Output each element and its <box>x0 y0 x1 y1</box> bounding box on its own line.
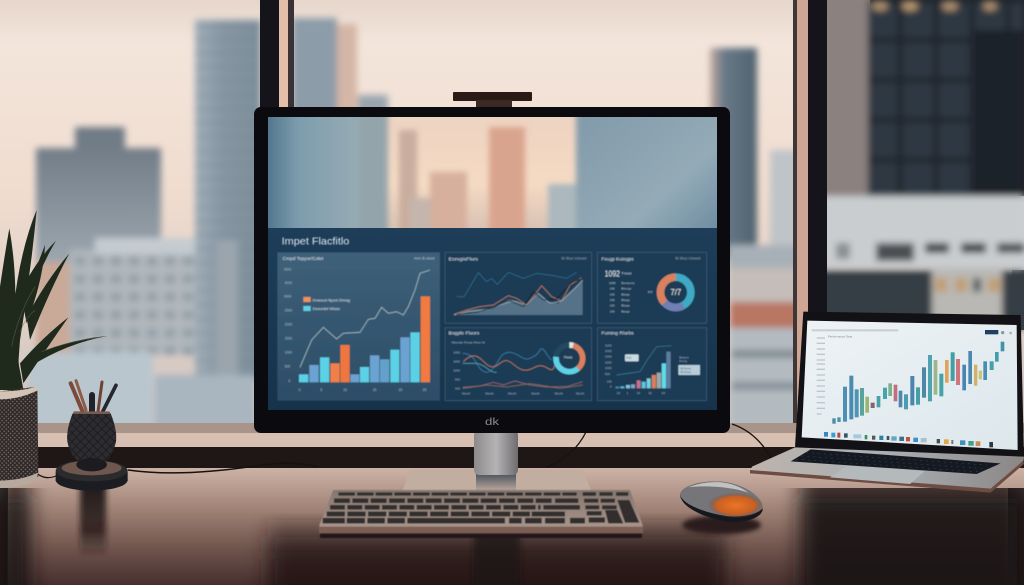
small table: 100 <box>610 298 615 302</box>
trend line <box>300 270 430 367</box>
y axis labels: 5000 <box>284 267 292 271</box>
pineapple body <box>67 413 116 467</box>
axis labels: 0 <box>610 385 612 389</box>
lines <box>463 349 583 388</box>
axis labels: Month <box>576 392 585 396</box>
side legend: Fumg <box>679 359 687 363</box>
leaf highlights <box>12 287 100 352</box>
x axis labels <box>299 388 427 392</box>
panel: area chart: EorvgisFlurs <box>449 256 479 262</box>
panel: donut summary <box>597 252 707 323</box>
trackpad <box>830 466 925 484</box>
panel: area chart: Bl Bluc Ulswet <box>561 257 587 261</box>
y axis labels: 1500 <box>285 337 292 341</box>
axis labels: 1000 <box>605 355 612 359</box>
leaves <box>0 210 107 390</box>
laptop lid <box>795 312 1024 457</box>
small table: 100 <box>610 303 615 307</box>
dashboard title: Impet Flacfitlo <box>282 236 350 247</box>
webcam <box>453 92 532 108</box>
small table: 1080 <box>609 281 616 285</box>
bars <box>615 352 671 388</box>
axis labels: Month <box>555 392 563 396</box>
axis labels: 15 <box>648 391 652 395</box>
monitor logo: dk <box>485 417 500 428</box>
panel: bar and line chart: mm B ulust <box>414 257 435 261</box>
panel: bar and line chart: Cmpd Tepyor/Colet <box>283 256 324 262</box>
panel: area chart <box>445 252 592 323</box>
legend: Desurdet Wlsse <box>313 306 341 311</box>
panel: donut summary: Fougp Kutogps <box>601 256 634 262</box>
panel: multi-line and donut <box>445 328 592 401</box>
floating bar chart <box>832 342 1004 424</box>
wooden desk <box>0 468 1024 585</box>
axis labels: 1000 <box>453 360 460 364</box>
side legend: Bl Flums <box>681 366 692 370</box>
x axis labels: 10 <box>343 388 347 392</box>
legend: Dmesod Npzzi Dlmag <box>313 297 350 302</box>
x axis labels: 20 <box>399 388 403 392</box>
chart toolbar: Performance Data <box>828 335 853 339</box>
axis labels: 1000 <box>453 369 460 373</box>
tooltip: Fut <box>626 356 631 360</box>
monitor <box>250 100 736 433</box>
window sky <box>0 0 1024 430</box>
axis labels: 500 <box>455 378 460 382</box>
axis labels: Month <box>485 392 494 396</box>
y axis labels: 500 <box>285 365 290 369</box>
monitor stand <box>402 430 592 492</box>
small table: Bsmtpmts <box>621 281 635 285</box>
y axis labels: 2000 <box>285 323 292 327</box>
side legend <box>678 355 700 375</box>
laptop base <box>750 447 1024 492</box>
small table: 100 <box>610 292 615 296</box>
panel: multi-line and donut: Mlorda Tlmte Flmt Sl <box>452 341 485 345</box>
axis labels: Month <box>531 392 540 396</box>
panel: donut summary: FY <box>648 290 653 294</box>
cables <box>35 424 771 478</box>
small table: 100 <box>610 286 615 290</box>
window frame mullions <box>260 0 827 430</box>
small table: Blomgs <box>621 286 632 290</box>
axis labels: Month <box>508 392 517 396</box>
donut <box>556 345 583 372</box>
side legend: Bustmt <box>679 355 689 359</box>
base disc <box>56 469 128 491</box>
building colour at frame edges <box>820 0 1024 330</box>
axis labels: 100 <box>455 387 460 391</box>
small table: Blotge <box>621 303 630 307</box>
axis labels: Month <box>462 392 471 396</box>
pencils <box>71 381 116 412</box>
panel: multi-line and donut: Bogple Fluors <box>449 331 480 337</box>
trend line <box>617 346 672 375</box>
axis labels: 1 <box>627 391 629 395</box>
small table: 100 <box>610 309 615 313</box>
bars <box>299 296 430 382</box>
legend <box>303 297 350 311</box>
pot <box>0 386 38 488</box>
window sill and ledge <box>38 423 1024 469</box>
axis labels: 10 <box>617 391 620 395</box>
x axis labels: 15 <box>373 388 377 392</box>
y axis labels <box>284 267 292 383</box>
keyboard <box>319 490 643 538</box>
chart toolbar <box>812 329 1012 339</box>
panel: bar and line chart <box>277 252 440 401</box>
dashboard background <box>268 228 717 410</box>
x axis labels: 0 <box>299 388 301 392</box>
taskbar icons <box>824 432 993 447</box>
axis labels: 100 <box>607 379 612 383</box>
axis labels: 1000 <box>605 343 612 347</box>
axis labels: 1000 <box>453 351 460 355</box>
y axis labels: 3000 <box>284 295 292 299</box>
x axis labels: 25 <box>423 388 427 392</box>
y axis labels: 0 <box>288 379 290 383</box>
y axis labels: 1000 <box>285 351 292 355</box>
laptop keyboard <box>791 449 1001 474</box>
axis labels: 20 <box>662 391 665 395</box>
screen upper window view <box>268 117 717 228</box>
area fill <box>454 280 583 315</box>
axis labels: 1000 <box>605 360 612 364</box>
key number: 1092 <box>605 269 620 279</box>
small table: Blotge <box>621 298 630 302</box>
panel: small bar chart: Fumtng Rlurbs <box>601 331 634 337</box>
panel: multi-line and donut: Ftuns <box>564 356 573 360</box>
series lines <box>454 272 583 315</box>
small table: Blotge <box>621 292 630 296</box>
donut <box>661 277 691 307</box>
mouse <box>680 482 764 534</box>
blurred city skyline <box>28 0 1024 445</box>
axis labels: 1000 <box>605 349 612 353</box>
pencil holder <box>56 381 128 491</box>
plant <box>0 210 107 488</box>
axis labels: 1000 <box>605 366 612 370</box>
panel: small bar chart <box>597 328 707 401</box>
axis labels: 10 <box>637 391 640 395</box>
panel: donut summary: 7/7 <box>670 288 682 297</box>
y axis labels: 2500 <box>285 309 292 313</box>
monitor bezel <box>254 107 730 433</box>
side legend: Bl Flums <box>681 370 692 374</box>
y axis labels: 4000 <box>285 281 292 285</box>
small table: Blotge <box>621 309 630 313</box>
laptop <box>750 312 1024 493</box>
small table <box>609 281 635 313</box>
axis labels <box>453 351 585 396</box>
axis labels <box>605 343 665 395</box>
x axis labels: 5 <box>320 388 322 392</box>
panel: donut summary: Fxuus <box>622 272 632 276</box>
laptop display <box>802 321 1018 450</box>
dashboard <box>277 236 707 401</box>
axis labels: 500 <box>605 372 610 376</box>
y axis ticks <box>817 338 825 414</box>
panel: donut summary: Bl Bluc Ulswet <box>675 257 701 261</box>
